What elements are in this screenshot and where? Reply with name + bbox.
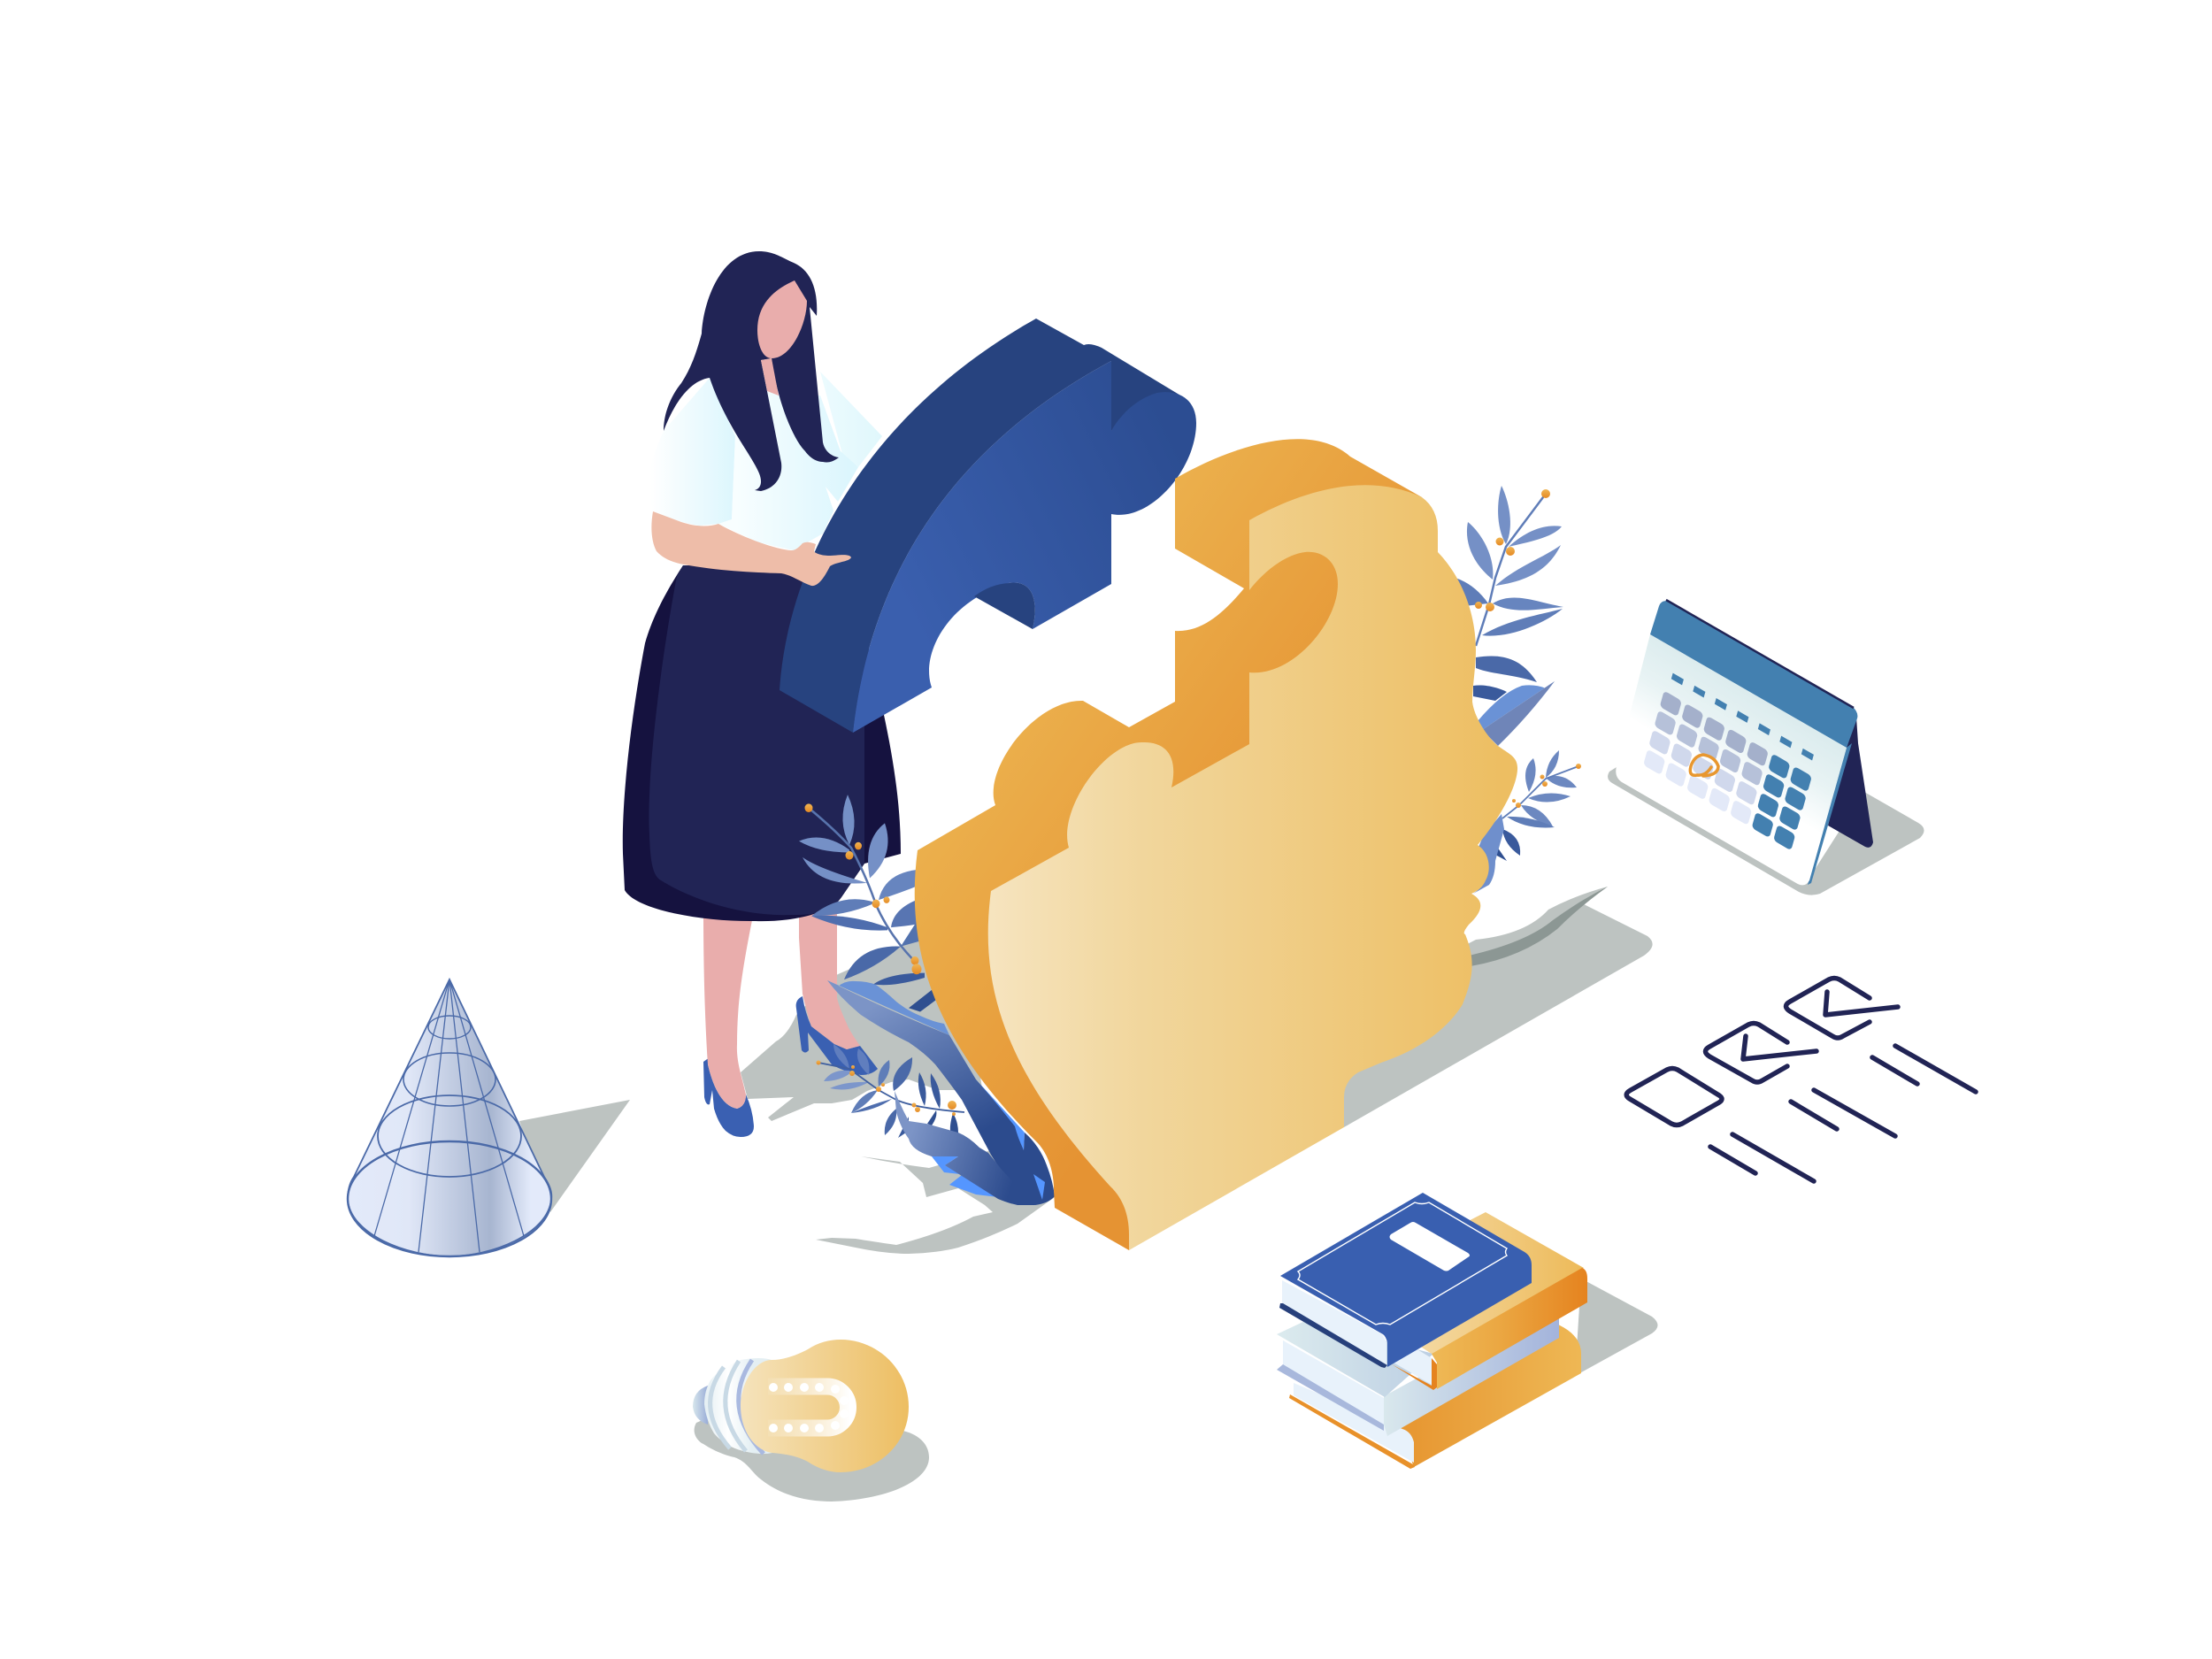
bottom book pages <box>1294 1383 1414 1463</box>
front face <box>988 485 1517 1250</box>
face <box>757 280 807 358</box>
blue book strip <box>1279 1303 1387 1368</box>
upper leaves <box>1498 486 1510 544</box>
shirt body <box>710 378 858 550</box>
date grid <box>1643 671 1817 850</box>
leaves <box>833 1044 849 1069</box>
row 4 <box>1643 749 1752 826</box>
light upper part <box>827 980 949 1035</box>
skirt back <box>623 565 901 921</box>
leaves <box>842 795 855 845</box>
lower leaves <box>1525 758 1536 792</box>
notch <box>974 582 1035 629</box>
middle book pages <box>1283 1340 1384 1425</box>
light bulb <box>693 1340 929 1502</box>
checkbox 2 <box>1706 1023 1787 1082</box>
bright tip <box>1033 1174 1045 1200</box>
books <box>1277 1193 1658 1469</box>
list lines 3 <box>1872 1046 1976 1092</box>
shadow: leaf on head shadow <box>1469 887 1608 966</box>
shadow: head <box>1327 887 1653 1127</box>
plant: second leaf <box>895 1091 1035 1205</box>
page <box>1616 634 1847 885</box>
ribs <box>374 979 524 1252</box>
glass <box>741 1340 909 1472</box>
tick 2 <box>1743 1036 1816 1059</box>
blue book label <box>1389 1222 1470 1271</box>
plant: left sprig <box>799 795 938 1012</box>
screw base <box>704 1358 772 1454</box>
berries <box>805 803 922 974</box>
left shoe <box>703 1057 754 1137</box>
middle book top <box>1277 1320 1433 1397</box>
leaf body <box>895 1091 1035 1205</box>
list lines 1 <box>1710 1134 1814 1181</box>
row 3 <box>1648 729 1757 806</box>
orange book side <box>1432 1268 1587 1389</box>
woman arm <box>651 511 851 586</box>
lower stem <box>1502 766 1578 818</box>
big leaf <box>1478 681 1555 730</box>
bottom book strip <box>1289 1394 1415 1469</box>
shadow: woman and plants <box>741 938 982 1121</box>
weekend cells <box>1752 754 1812 850</box>
left leg <box>703 911 754 1109</box>
woman back <box>623 251 901 1137</box>
led dots <box>769 1383 849 1432</box>
berries <box>816 1060 956 1116</box>
orange book strip <box>1392 1358 1437 1390</box>
date circle <box>1690 755 1718 776</box>
right leg <box>799 911 860 1049</box>
shadow: leaf lower <box>816 1150 1055 1254</box>
big leaf lower <box>1482 681 1555 746</box>
header top edge <box>1666 600 1854 708</box>
middle book strip <box>1277 1364 1384 1431</box>
shadow <box>695 1398 929 1502</box>
bright underside <box>976 1079 1025 1150</box>
day marks <box>1671 673 1814 761</box>
berries <box>1475 489 1581 808</box>
orange book pages <box>1394 1348 1432 1385</box>
checkbox 1 <box>1626 1069 1722 1125</box>
tick 3 <box>1825 992 1898 1015</box>
puzzle head <box>915 439 1517 1250</box>
neck <box>761 358 779 396</box>
blue book pages <box>1282 1280 1386 1365</box>
row 2 <box>1655 710 1763 787</box>
bottom book cover <box>1398 1314 1581 1467</box>
lips leaf <box>1473 814 1504 894</box>
plant: right sprigs <box>1451 486 1581 894</box>
front face <box>853 361 1196 733</box>
row 1 <box>1660 690 1769 767</box>
back sleeve <box>820 372 882 467</box>
shadow <box>1608 767 1924 895</box>
middle book side <box>1384 1301 1559 1436</box>
shirt sleeve <box>646 378 735 526</box>
cone <box>348 979 630 1256</box>
body <box>348 979 551 1256</box>
upper stem <box>1476 494 1546 646</box>
tip <box>693 1386 708 1425</box>
plant: big leaf <box>827 980 1055 1205</box>
blue puzzle piece <box>780 319 1196 733</box>
stand <box>1828 717 1873 848</box>
header <box>1650 601 1857 748</box>
side <box>915 439 1422 1250</box>
stem <box>818 1063 964 1112</box>
skirt front <box>649 565 864 915</box>
shirt fold <box>826 487 838 513</box>
right shoe <box>796 996 878 1075</box>
shadow <box>519 1100 630 1212</box>
rings <box>348 1016 551 1256</box>
calendar <box>1608 600 1924 895</box>
plant: lower sprig <box>816 1044 964 1138</box>
led strip <box>768 1386 848 1428</box>
side <box>780 319 1182 733</box>
list lines 2 <box>1791 1090 1895 1136</box>
bright parts <box>932 1156 998 1197</box>
checkbox 3 <box>1786 979 1870 1038</box>
shadow <box>1575 1279 1658 1376</box>
orange book top <box>1407 1212 1584 1354</box>
blue book border <box>1298 1202 1507 1325</box>
thread stripes <box>710 1360 764 1454</box>
stem <box>809 808 914 961</box>
blue edge <box>1808 743 1852 885</box>
hair <box>664 251 839 491</box>
blue book cover <box>1280 1193 1532 1367</box>
checklist <box>1626 979 1976 1181</box>
leaf body <box>827 980 1055 1205</box>
